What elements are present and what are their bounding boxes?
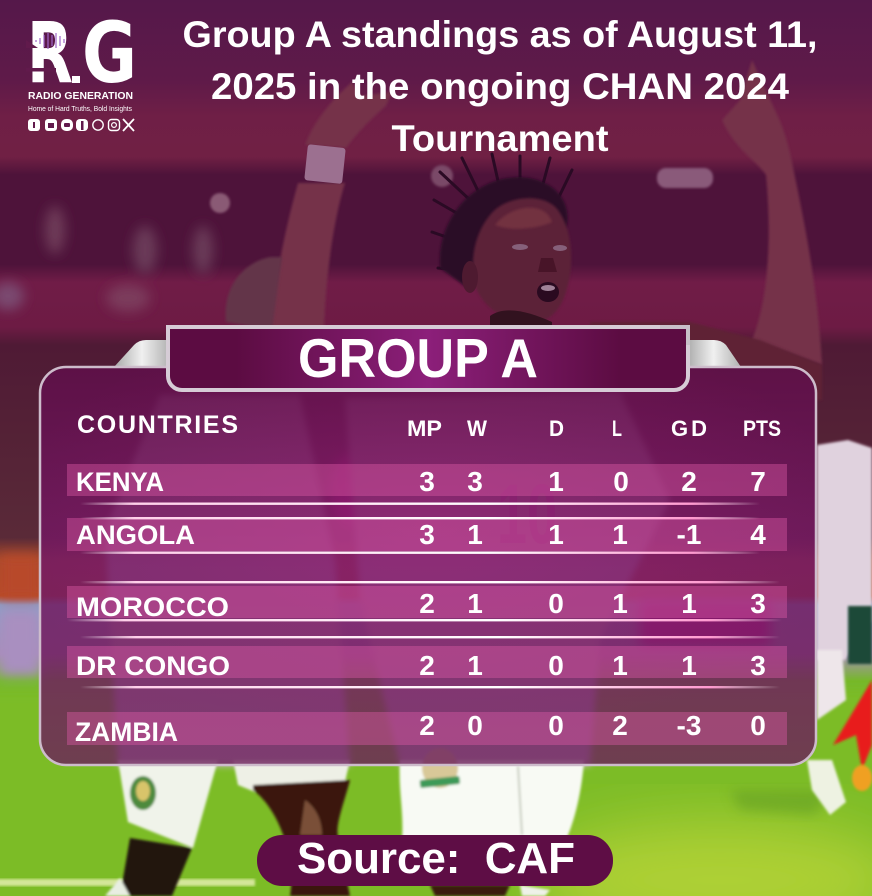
row: Kenya: 3 [467, 466, 483, 497]
player shoulder right [590, 322, 822, 400]
left arm and hand [270, 82, 392, 330]
header: GROUP A banner [166, 325, 690, 390]
row: DR Congo: 1 [681, 650, 697, 681]
row: Zambia: 2 [419, 710, 435, 741]
wristband [304, 144, 346, 184]
source pill: Source: CAF [297, 834, 575, 883]
left silver tab [114, 340, 170, 367]
table column headers: GD [671, 416, 707, 441]
card body [40, 367, 816, 765]
row: Kenya: 1 [548, 466, 564, 497]
logo: Radio Generation: G [82, 4, 137, 102]
row: Morocco: 1 [681, 588, 697, 619]
logo: Radio Generation: Home of Hard Truths, Bold Insights [28, 106, 132, 113]
row: Morocco: 0 [548, 588, 564, 619]
hair [432, 154, 572, 270]
title [182, 14, 818, 159]
row: DR Congo: 3 [750, 650, 766, 681]
table column headers: COUNTRIES [77, 411, 238, 439]
row: Morocco: 3 [750, 588, 766, 619]
row: DR Congo [76, 650, 766, 681]
row: Zambia [75, 710, 766, 747]
row: Zambia: 0 [548, 710, 564, 741]
row: DR Congo: 0 [548, 650, 564, 681]
row: Zambia: 0 [750, 710, 766, 741]
ear of player behind [226, 257, 282, 330]
table rows: tinted bars [67, 464, 787, 745]
title: 2025 in the ongoing CHAN 2024 [211, 66, 789, 107]
table column headers [77, 411, 781, 441]
row: Angola: 4 [750, 519, 766, 550]
header: GROUP A banner: GROUP A [298, 327, 538, 389]
row: Angola [76, 519, 766, 550]
player: celebrating, arms raised (tinted) [105, 60, 872, 766]
card magenta glow [41, 368, 815, 764]
row: Zambia: -3 [677, 710, 701, 741]
table column headers: D [549, 416, 564, 441]
table column headers: MP [407, 416, 442, 441]
title: Tournament [392, 118, 608, 159]
row: Morocco: 1 [612, 588, 628, 619]
row: Morocco: 2 [419, 588, 435, 619]
row: Morocco: MOROCCO [76, 592, 229, 622]
row: Zambia: 0 [467, 710, 483, 741]
right silver tab [686, 340, 741, 367]
row: Kenya [76, 466, 766, 497]
row: Angola: 1 [612, 519, 628, 550]
row separator lines [67, 502, 782, 688]
logo: Radio Generation: R [27, 4, 73, 102]
row: Angola: 1 [548, 519, 564, 550]
player: lower body on pitch [105, 680, 872, 896]
row: Kenya: 7 [750, 466, 766, 497]
table column headers: W [467, 416, 487, 441]
face [473, 198, 571, 324]
bodies seen through the card [105, 392, 670, 766]
row: DR Congo: 1 [467, 650, 483, 681]
right-hand player shirt [817, 440, 872, 660]
row: Zambia: 2 [612, 710, 628, 741]
row: Angola: -1 [677, 519, 701, 550]
row: DR Congo: 2 [419, 650, 435, 681]
table column headers: PTS [743, 416, 781, 441]
row: Morocco [76, 588, 766, 622]
row: Angola: 3 [419, 519, 435, 550]
jersey number on shirt: 10 [497, 467, 557, 561]
row: DR Congo: DR CONGO [76, 651, 230, 681]
row: Angola: ANGOLA [76, 520, 195, 550]
social icons [28, 119, 134, 131]
row: Angola: 1 [467, 519, 483, 550]
panel: standings card with tabs [40, 340, 816, 765]
logo: Radio Generation: RADIO GENERATION [28, 90, 133, 102]
row: Kenya: 0 [613, 466, 629, 497]
row: Morocco: 1 [467, 588, 483, 619]
row: Kenya: 3 [419, 466, 435, 497]
title: Group A standings as of August 11, [182, 14, 818, 55]
table column headers: L [612, 416, 622, 441]
row: DR Congo: 1 [612, 650, 628, 681]
row: Zambia: ZAMBIA [75, 717, 178, 747]
row: Kenya: KENYA [76, 467, 164, 497]
row: Kenya: 2 [681, 466, 697, 497]
right arm and hand [722, 60, 822, 365]
magenta advert glows behind the card [330, 454, 770, 646]
logo: Radio Generation [26, 4, 137, 131]
right-hand player shorts and kit [848, 606, 872, 664]
